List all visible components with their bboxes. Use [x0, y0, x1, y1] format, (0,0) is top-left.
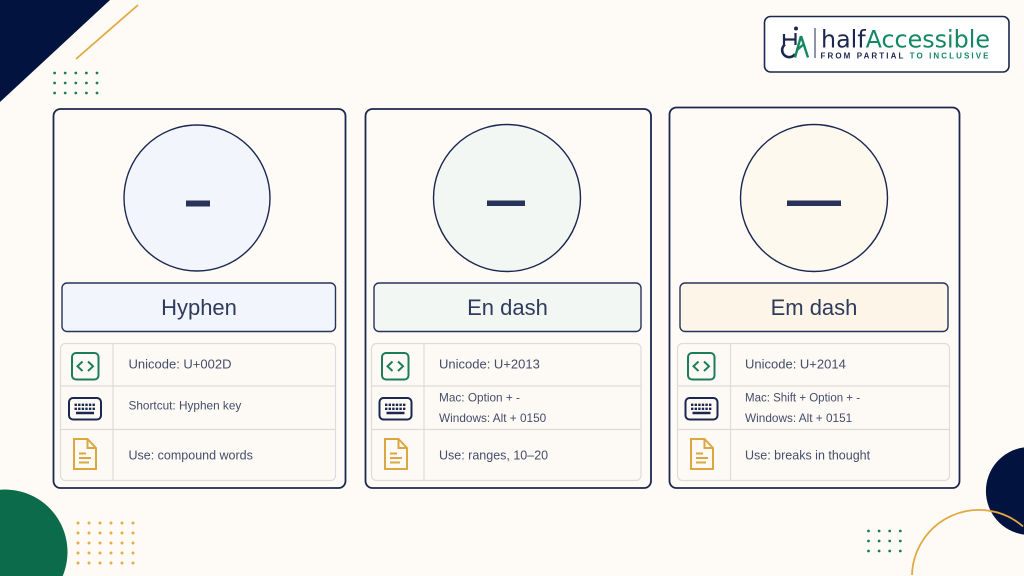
icon: document: [385, 439, 407, 469]
glyph circle: hyphen: [124, 125, 270, 271]
text: unicode: Unicode: U+2014: [745, 356, 846, 372]
text: use: Use: ranges, 10–20: [439, 448, 548, 462]
icon: code: [382, 353, 408, 380]
decoration: green dot grid top left: [53, 72, 98, 94]
heading: En dash: En dash: [467, 295, 548, 320]
panel: hyphen card: [54, 109, 346, 488]
decoration: gold ring bottom right: [912, 510, 1023, 575]
text: use: Use: breaks in thought: [745, 448, 871, 462]
icon: keyboard: [69, 398, 101, 420]
icon: keyboard: [686, 398, 718, 420]
icon: accessibility mark: [782, 26, 808, 58]
text: shortcuts: [439, 390, 547, 425]
panel: en dash card: [366, 109, 651, 488]
text: shortcut: Shortcut: Hyphen key: [128, 398, 241, 412]
heading: Hyphen: [62, 283, 336, 332]
glyph circle: en dash: [434, 124, 580, 272]
logo tagline: FROM PARTIAL TO INCLUSIVE: [820, 52, 990, 60]
heading: En dash: [374, 283, 641, 332]
info table: en dash: [372, 344, 641, 480]
info table: hyphen: [60, 344, 336, 480]
text: use: Use: compound words: [128, 448, 253, 462]
text: shortcuts: [745, 392, 860, 425]
panel: em dash card: [670, 108, 960, 488]
text: unicode: Unicode: U+2013: [439, 356, 540, 372]
icon: document: [74, 439, 96, 469]
text: shortcuts: Windows: Alt + 0151: [745, 411, 852, 425]
icon: code: [72, 353, 98, 380]
text: shortcuts: Windows: Alt + 0150: [439, 411, 547, 425]
heading: Em dash: Em dash: [771, 295, 857, 320]
icon: document: [691, 439, 713, 469]
decoration: green dot grid bottom right: [867, 530, 902, 552]
logo: halfAccessible: [764, 16, 1009, 72]
decoration: gold diagonal line: [76, 5, 138, 59]
decoration: navy corner triangle: [0, 0, 110, 102]
decoration: navy circle bottom right: [986, 447, 1024, 535]
info table: em dash: [678, 344, 950, 480]
text: shortcuts: Mac: Shift + Option + -: [745, 392, 860, 404]
decoration: green circle bottom left: [0, 490, 67, 576]
decoration: orange dot grid bottom left: [76, 522, 134, 564]
heading: Hyphen: Hyphen: [161, 295, 237, 320]
icon: code: [688, 353, 714, 380]
heading: Em dash: [680, 283, 948, 332]
glyph circle: em dash: [740, 124, 888, 272]
logo wordmark: halfAccessible: [821, 26, 990, 54]
text: shortcuts: Mac: Option + -: [439, 390, 520, 404]
text: unicode: Unicode: U+002D: [128, 356, 231, 372]
icon: keyboard: [380, 398, 412, 420]
